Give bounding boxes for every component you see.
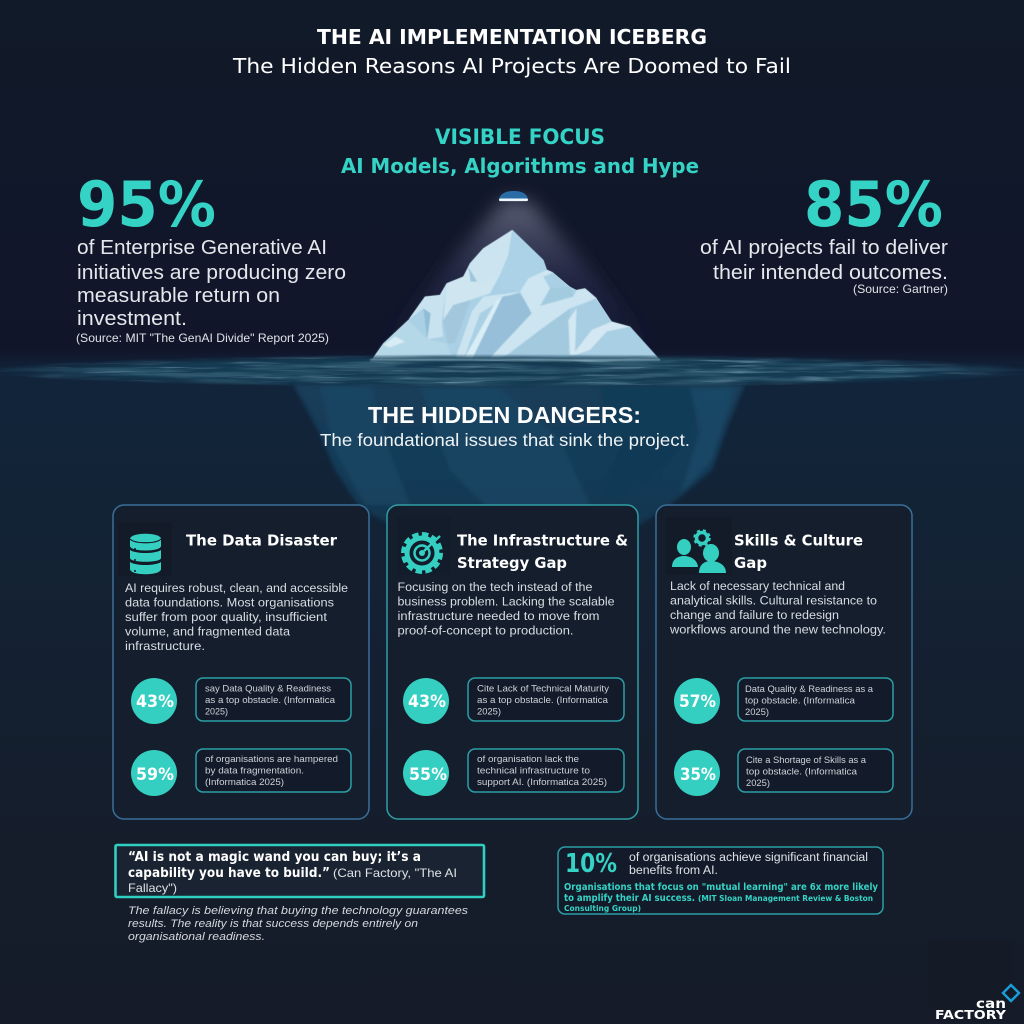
logo: can factory: FACTORY bbox=[935, 1008, 1006, 1022]
panel: skills and culture gap bbox=[656, 505, 912, 819]
body text: AI requires robust, clean, and accessible bbox=[125, 581, 348, 595]
callout: 10 percent: Organisations that focus on "mutual learning" are 6x more likely bbox=[564, 882, 879, 893]
stat: 43 percent: as a top obstacle. (Informatica bbox=[205, 694, 336, 705]
body text: data foundations. Most organisations bbox=[125, 596, 334, 610]
stat: 43 percent: Cite Lack of Technical Maturity bbox=[477, 682, 609, 694]
callout: 10 percent: Consulting Group) bbox=[564, 904, 641, 913]
stat: 57 percent bbox=[674, 678, 893, 724]
stat: 35 percent: Cite a Shortage of Skills as a bbox=[746, 754, 867, 765]
stat: 43 percent bbox=[131, 678, 351, 724]
icon: people and gear bbox=[666, 517, 732, 575]
stat: 85 percent: (Source: Gartner) bbox=[853, 282, 948, 296]
panel: the infrastructure and strategy gap bbox=[387, 505, 638, 819]
stat: 35 percent: 35% bbox=[680, 765, 716, 785]
illustration: submerged iceberg bbox=[293, 384, 745, 548]
stat: 57 percent: 57% bbox=[679, 692, 716, 712]
stat: 43 percent bbox=[403, 678, 624, 724]
stat: 55 percent: technical infrastructure to bbox=[477, 764, 590, 776]
heading: The Data Disaster bbox=[186, 532, 337, 550]
text block: fallacy explanation: The fallacy is believing that buying the technology guarantees bbox=[128, 905, 469, 917]
callout: 10 percent: (MIT Sloan Management Review & Boston bbox=[698, 894, 873, 903]
icon: gear with target bbox=[397, 517, 451, 575]
title bbox=[232, 25, 791, 78]
body text: business problem. Lacking the scalable bbox=[398, 594, 615, 608]
heading: The Infrastructure & bbox=[457, 532, 628, 550]
stat: 55 percent: support AI. (Informatica 2025) bbox=[477, 776, 607, 787]
stat: 43 percent: say Data Quality & Readiness bbox=[205, 682, 331, 694]
heading: Skills & Culture bbox=[734, 532, 863, 550]
callout: 10 percent: of organisations achieve significant financial bbox=[629, 852, 868, 864]
callout: 10 percent: 10% bbox=[565, 849, 617, 879]
callout: 10 percent: to amplify their AI success. bbox=[564, 893, 695, 904]
stat: 95 percent: (Source: MIT "The GenAI Divide" Report 2025) bbox=[76, 331, 329, 345]
icon: database bbox=[118, 522, 172, 576]
heading: visible focus bbox=[341, 125, 699, 178]
heading: Strategy Gap bbox=[457, 554, 567, 572]
text block: fallacy explanation: organisational readiness. bbox=[128, 931, 265, 943]
heading: visible focus: VISIBLE FOCUS bbox=[435, 125, 605, 149]
stat: 43 percent: 43% bbox=[136, 692, 174, 712]
stat: 95 percent: measurable return on bbox=[77, 285, 280, 307]
illustration: ocean waterline bbox=[0, 354, 1024, 386]
stat: 55 percent: 55% bbox=[409, 765, 447, 785]
stat: 95 percent: investment. bbox=[77, 308, 187, 330]
heading bbox=[457, 532, 628, 572]
callout: quote: (Can Factory, "The AI bbox=[333, 866, 457, 880]
icon: spotlight lamp bbox=[499, 191, 528, 201]
title: The Hidden Reasons AI Projects Are Doomed to Fail bbox=[232, 54, 791, 78]
stat: 57 percent: 2025) bbox=[745, 706, 769, 717]
body text: infrastructure needed to move from bbox=[398, 609, 600, 623]
stat: 55 percent: of organisation lack the bbox=[477, 753, 579, 764]
panel: the data disaster bbox=[113, 505, 369, 819]
stat: 95 percent: 95% bbox=[77, 168, 216, 241]
body text: suffer from poor quality, insufficient bbox=[125, 610, 328, 624]
text block: fallacy explanation: results. The reality is that success depends entirely on bbox=[128, 918, 418, 930]
stat: 85 percent: of AI projects fail to deliver bbox=[700, 237, 948, 259]
body text bbox=[398, 580, 615, 638]
stat: 59 percent: of organisations are hampered bbox=[205, 753, 338, 764]
stat: 59 percent: (Informatica 2025) bbox=[205, 776, 284, 787]
stat: 43 percent: 43% bbox=[408, 692, 446, 712]
stat: 35 percent bbox=[674, 749, 893, 796]
stat: 43 percent: 2025) bbox=[477, 706, 501, 716]
body text bbox=[125, 581, 348, 653]
stat: 59 percent: 59% bbox=[136, 765, 174, 785]
callout: 10 percent bbox=[558, 847, 883, 914]
callout: quote bbox=[116, 845, 484, 897]
stat: 57 percent: Data Quality & Readiness as a bbox=[745, 683, 874, 694]
light cone from spotlight bbox=[380, 201, 655, 345]
stat: 43 percent: 2025) bbox=[205, 706, 228, 716]
stat: 59 percent: by data fragmentation. bbox=[205, 764, 304, 776]
stat: 85 percent: 85% bbox=[804, 168, 943, 241]
callout: 10 percent: benefits from AI. bbox=[629, 865, 718, 877]
callout: quote: Fallacy") bbox=[128, 881, 177, 895]
logo: can factory bbox=[929, 940, 1019, 1022]
heading: the hidden dangers bbox=[320, 402, 690, 450]
body text: workflows around the new technology. bbox=[669, 622, 886, 636]
stat: 35 percent: top obstacle. (Informatica bbox=[746, 766, 858, 776]
body text: Focusing on the tech instead of the bbox=[398, 580, 593, 594]
body text: infrastructure. bbox=[125, 639, 205, 653]
illustration: iceberg above water bbox=[372, 230, 660, 360]
text block: fallacy explanation bbox=[128, 905, 469, 943]
stat: 55 percent bbox=[403, 749, 624, 796]
stat: 85 percent bbox=[700, 168, 948, 296]
stat: 95 percent: initiatives are producing zero bbox=[77, 262, 346, 284]
body text bbox=[669, 579, 886, 636]
callout: quote: “AI is not a magic wand you can buy; it’s a bbox=[128, 850, 421, 865]
heading bbox=[734, 532, 863, 572]
heading: visible focus: AI Models, Algorithms and Hype bbox=[341, 154, 699, 178]
stat: 35 percent: 2025) bbox=[746, 777, 770, 788]
body text: change and failure to redesign bbox=[670, 608, 839, 622]
stat: 95 percent: of Enterprise Generative AI bbox=[77, 237, 327, 259]
stat: 95 percent bbox=[76, 168, 346, 345]
heading: the hidden dangers: The foundational issues that sink the project. bbox=[320, 430, 690, 450]
logo: can factory: can bbox=[976, 997, 1006, 1012]
heading: Gap bbox=[734, 554, 767, 572]
body text: proof-of-concept to production. bbox=[398, 624, 574, 638]
stat: 57 percent: top obstacle. (Informatica bbox=[745, 694, 856, 706]
body text: volume, and fragmented data bbox=[125, 624, 290, 638]
callout: quote: capability you have to build.” bbox=[128, 866, 330, 881]
body text: Lack of necessary technical and bbox=[670, 579, 845, 593]
stat: 59 percent bbox=[131, 749, 351, 796]
body text: analytical skills. Cultural resistance to bbox=[670, 594, 877, 608]
title: THE AI IMPLEMENTATION ICEBERG bbox=[317, 25, 707, 49]
heading: the hidden dangers: THE HIDDEN DANGERS: bbox=[368, 402, 641, 428]
stat: 85 percent: their intended outcomes. bbox=[713, 262, 948, 284]
stat: 43 percent: as a top obstacle. (Informatica bbox=[477, 694, 609, 705]
